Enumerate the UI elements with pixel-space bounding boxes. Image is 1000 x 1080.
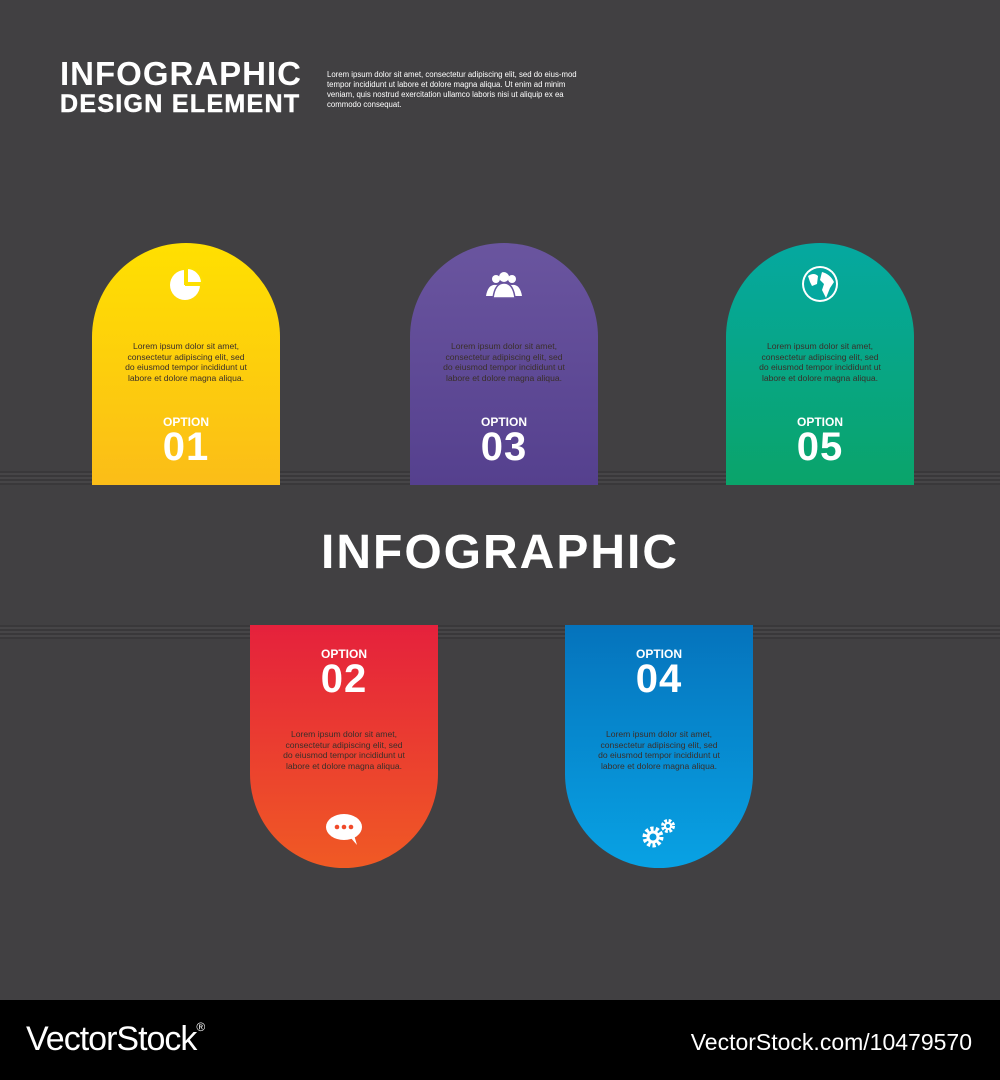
text xyxy=(598,729,720,770)
card: option 05: 05 xyxy=(797,425,843,469)
card: option 01: OPTION xyxy=(163,415,209,429)
card: option 01 xyxy=(92,243,280,485)
text: labore et dolore magna aliqua. xyxy=(762,372,878,382)
card: option 03: 03 xyxy=(481,425,527,469)
title: DESIGN ELEMENT xyxy=(60,90,300,118)
text xyxy=(759,341,881,382)
card: option 03: OPTION xyxy=(481,415,527,429)
card: option 05: OPTION xyxy=(797,415,843,429)
title xyxy=(60,55,302,118)
text xyxy=(125,341,247,382)
text: labore et dolore magna aliqua. xyxy=(446,372,562,382)
footer url: VectorStock.com/10479570 xyxy=(691,1029,972,1055)
text: labore et dolore magna aliqua. xyxy=(286,760,402,770)
text: consectetur adipiscing elit, sed xyxy=(445,352,563,362)
text: labore et dolore magna aliqua. xyxy=(128,372,244,382)
icon: globe xyxy=(802,266,838,302)
text: consectetur adipiscing elit, sed xyxy=(600,740,718,750)
text: do eiusmod tempor incididunt ut xyxy=(598,750,720,760)
card: option 02: OPTION xyxy=(321,647,367,661)
card: option 03 xyxy=(410,243,598,485)
text: labore et dolore magna aliqua. xyxy=(601,760,717,770)
card: option 02: 02 xyxy=(321,657,367,701)
card: option 01: 01 xyxy=(163,425,209,469)
text: do eiusmod tempor incididunt ut xyxy=(283,750,405,760)
text: Lorem ipsum dolor sit amet, xyxy=(133,341,239,351)
icon: pie chart xyxy=(170,269,201,300)
text: consectetur adipiscing elit, sed xyxy=(285,740,403,750)
card: option 04 xyxy=(565,625,753,868)
text: Lorem ipsum dolor sit amet, xyxy=(767,341,873,351)
text: do eiusmod tempor incididunt ut xyxy=(443,362,565,372)
card: option 04: OPTION xyxy=(636,647,682,661)
icon: people xyxy=(486,272,522,298)
icon: speech bubble xyxy=(326,814,362,845)
center heading: INFOGRAPHIC xyxy=(321,526,679,579)
card: option 05 xyxy=(726,243,914,485)
card: option 04: 04 xyxy=(636,657,682,701)
text: do eiusmod tempor incididunt ut xyxy=(125,362,247,372)
card: option 02 xyxy=(250,625,438,868)
text: Lorem ipsum dolor sit amet, xyxy=(291,729,397,739)
intro text: Lorem ipsum dolor sit amet, consectetur adipiscing elit, sed do eius-mod tempor incididunt ut labore et dolore magna aliqua. Ut enim ad minim veniam, quis nostrud exercitation ullamco laboris nisi ut aliquip ex ea commodo consequat. xyxy=(327,70,577,109)
text: consectetur adipiscing elit, sed xyxy=(761,352,879,362)
decorative bands xyxy=(0,471,1000,485)
title: INFOGRAPHIC xyxy=(60,55,302,92)
text xyxy=(443,341,565,382)
text: consectetur adipiscing elit, sed xyxy=(127,352,245,362)
text: do eiusmod tempor incididunt ut xyxy=(759,362,881,372)
text: Lorem ipsum dolor sit amet, xyxy=(451,341,557,351)
footer logo: VectorStock® xyxy=(26,1020,204,1058)
text xyxy=(283,729,405,770)
text: Lorem ipsum dolor sit amet, xyxy=(606,729,712,739)
footer xyxy=(0,1000,1000,1080)
icon: gears xyxy=(642,819,675,848)
